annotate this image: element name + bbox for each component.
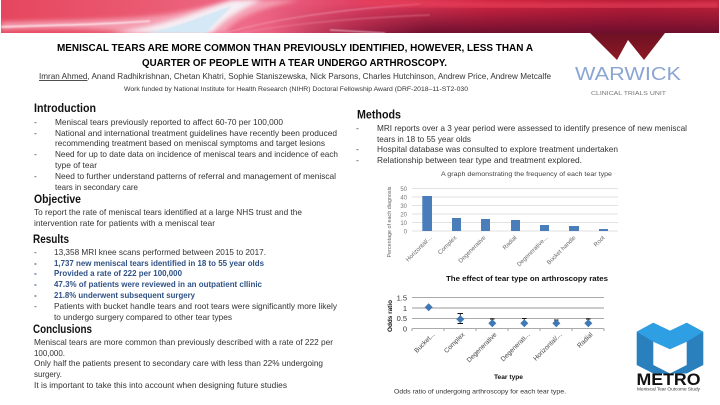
chart: odds ratio by tear type	[387, 274, 608, 396]
chart: odds ratio by tear type: Tear type	[494, 374, 524, 381]
bar chart: frequency of tear type: 50	[400, 187, 408, 193]
chart: odds ratio by tear type: Radial	[576, 331, 595, 350]
panel: introduction: tears in secondary care	[55, 182, 138, 192]
logo: Warwick: WARWICK	[575, 63, 682, 84]
panel: objective	[34, 194, 302, 228]
chart: odds ratio by tear type: 0	[403, 324, 407, 334]
chart: odds ratio by tear type: Horizontal/...	[532, 331, 564, 363]
bar chart: frequency of tear type: Radial	[502, 235, 518, 251]
panel: introduction: Meniscal tears previously reported to affect 60-70 per 100,000	[55, 117, 283, 127]
logo: METRO	[636, 323, 703, 392]
bar chart: frequency of tear type: 0	[404, 230, 408, 236]
bar chart: frequency of tear type: Horizontal/...	[405, 235, 434, 263]
chart: odds ratio by tear type: Odds ratio	[387, 300, 394, 332]
panel: conclusions: 100,000.	[34, 348, 65, 358]
bar chart: frequency of tear type: 40	[400, 196, 408, 202]
panel: results: Patients with bucket handle tears and root tears were significantly more likely	[54, 301, 338, 311]
logo: Warwick	[575, 33, 682, 97]
panel: results: -	[34, 290, 37, 300]
funding line: Work funded by National Institute for Health Research (NIHR) Doctoral Fellowship Award (DRF-2018–11-ST2-030	[124, 86, 468, 93]
panel: conclusions: Only half the patients present to secondary care with less than 22% undergoing	[34, 358, 323, 368]
chart: odds ratio by tear type: Degenerati...	[500, 331, 532, 363]
bar chart: frequency of tear type: 20	[400, 212, 408, 218]
panel: introduction: Need to further understand patterns of referral and management of meniscal	[55, 171, 336, 181]
panel: conclusions: Meniscal tears are more common than previously described with a rate of 222 per	[34, 337, 333, 347]
title: MENISCAL TEARS ARE MORE COMMON THAN PREVIOUSLY IDENTIFIED, HOWEVER, LESS THAN A	[57, 42, 533, 54]
panel: methods	[356, 110, 687, 165]
panel: results: Provided a rate of 222 per 100,000	[54, 268, 182, 278]
panel: conclusions: surgery.	[34, 369, 62, 379]
bar chart: frequency of tear type: Degenerative...	[516, 235, 550, 268]
panel: introduction: National and international treatment guidelines have recently been produced	[55, 128, 337, 138]
title: QUARTER OF PEOPLE WITH A TEAR UNDERGO ARTHROSCOPY.	[142, 57, 447, 69]
panel: results: 21.8% underwent subsequent surgery	[54, 290, 195, 300]
panel: results: -	[34, 268, 37, 278]
logo: METRO: METRO	[636, 371, 701, 389]
panel: results: 13,358 MRI knee scans performed between 2015 to 2017.	[54, 247, 266, 257]
authors: Imran Ahmed, Anand Radhikrishnan, Chetan Khatri, Sophie Staniszewska, Nick Parsons, Charles Hutchinson, Andrew Price, Andrew Metcalfe	[39, 71, 551, 81]
chart: odds ratio by tear type: 0.5	[397, 314, 407, 323]
panel: conclusions	[33, 324, 333, 390]
panel: methods: Relationship between tear type and treatment explored.	[377, 155, 582, 165]
chart: odds ratio by tear type: Complex	[443, 331, 467, 355]
logo: METRO: Meniscal Tear Outcome Study	[637, 386, 701, 392]
panel: results: -	[34, 301, 37, 311]
panel: methods: -	[356, 144, 359, 154]
panel: introduction	[34, 103, 338, 192]
bar chart: frequency of tear type: Degenerative	[458, 235, 488, 265]
bar chart: frequency of tear type: 30	[400, 204, 408, 210]
panel: results: -	[34, 279, 37, 289]
panel: objective: intervention rate for patients with a meniscal tear	[34, 218, 215, 228]
panel: introduction: Need for up to date data on incidence of meniscal tears and incidence of each	[55, 149, 338, 159]
panel: introduction: type of tear	[55, 160, 97, 170]
chart: odds ratio by tear type: Degenerative	[466, 331, 499, 364]
logo: Warwick: CLINICAL TRIALS UNIT	[591, 91, 667, 97]
panel: introduction: Introduction	[34, 103, 96, 115]
title	[57, 42, 533, 69]
banner	[1, 0, 720, 33]
panel: results: to undergo surgery compared to other tear types	[54, 312, 232, 322]
chart: odds ratio by tear type: 1.5	[397, 294, 407, 302]
panel: introduction: -	[34, 117, 37, 127]
bar chart: frequency of tear type: Bucket handle	[546, 235, 578, 266]
chart: odds ratio by tear type: 1	[403, 304, 407, 313]
bar chart: frequency of tear type: 10	[400, 221, 408, 227]
panel: introduction: recommending treatment based on meniscal symptoms and target lesions	[55, 138, 325, 148]
panel: objective: Objective	[34, 194, 81, 206]
panel: methods: Methods	[357, 110, 401, 122]
bar chart: frequency of tear type: Complex	[437, 235, 458, 256]
chart: odds ratio by tear type: Bucket...	[413, 331, 437, 355]
panel: results: -	[34, 247, 37, 257]
bar chart: frequency of tear type: Root	[593, 235, 607, 248]
chart: odds ratio by tear type: Odds ratio of undergoing arthroscopy for each tear type.	[394, 388, 566, 396]
panel: methods: tears in 18 to 55 year olds	[377, 134, 471, 144]
panel: results: -	[34, 258, 37, 268]
panel: methods: -	[356, 155, 359, 165]
panel: objective: To report the rate of meniscal tears identified at a large NHS trust and the	[34, 207, 302, 217]
bar chart: frequency of tear type: Percentage of each diagnosis	[387, 186, 393, 258]
panel: results: 47.3% of patients were reviewed in an outpatient cllinic	[54, 279, 262, 289]
chart: odds ratio by tear type: The effect of tear type on arthroscopy rates	[446, 274, 608, 283]
panel: methods: -	[356, 123, 359, 133]
bar chart: frequency of tear type	[387, 171, 618, 268]
panel: methods: Hospital database was consulted to explore treatment undertaken	[377, 144, 618, 154]
panel: methods: MRI reports over a 3 year period were assessed to identify presence of new meniscal	[377, 123, 687, 133]
bar chart: frequency of tear type: A graph demonstrating the frequency of each tear type	[441, 171, 613, 178]
panel: results: 1,737 new meniscal tears identified in 18 to 55 year olds	[54, 258, 264, 268]
panel: conclusions: It is important to take this into account when designing future studies	[34, 380, 287, 390]
panel: results	[33, 234, 338, 322]
panel: introduction: -	[34, 149, 37, 159]
panel: introduction: -	[34, 128, 37, 138]
panel: conclusions: Conclusions	[33, 324, 92, 336]
panel: results: Results	[33, 234, 69, 246]
panel: introduction: -	[34, 171, 37, 181]
